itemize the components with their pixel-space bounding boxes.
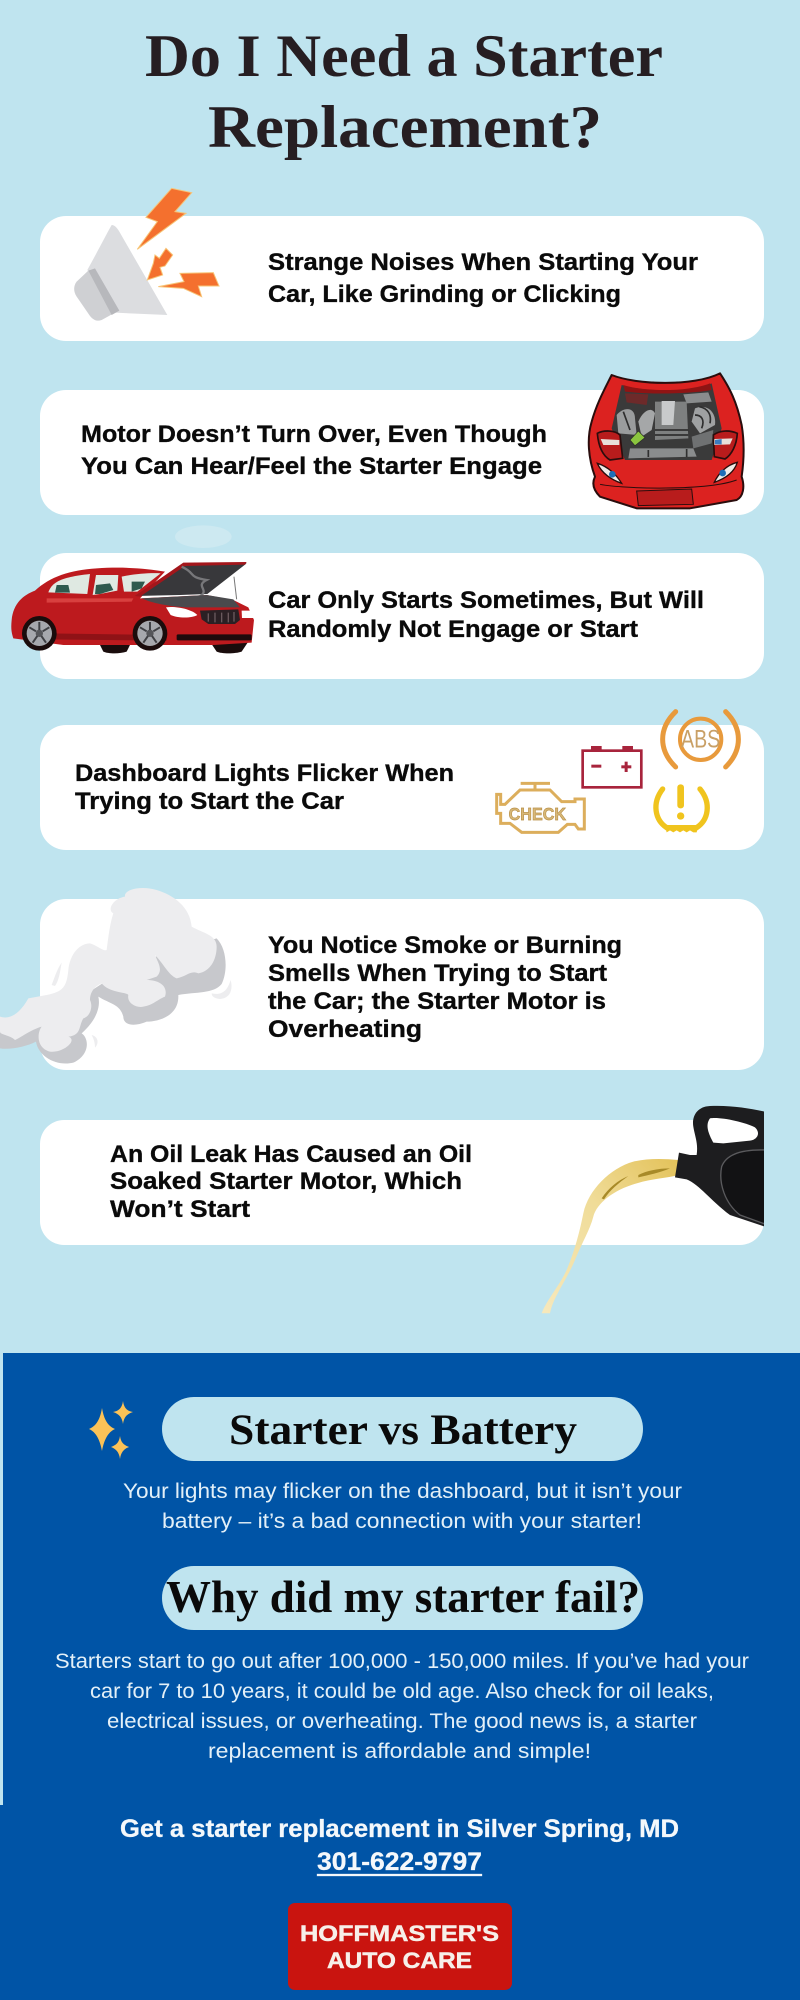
panel: oil leak [40,1106,765,1313]
logo: Hoffmaster's Auto Care [288,1903,512,1990]
icon: red car with open hood [589,373,744,508]
logo: Hoffmaster's Auto Care: HOFFMASTER'S [300,1921,499,1946]
text: strange noises [268,249,698,308]
text: why did my starter fail body: electrical issues, or overheating. The good news is, a starter [107,1710,697,1733]
text: dashboard lights flicker: Trying to Start the Car [75,788,344,815]
icon: red sedan with open hood [11,525,254,653]
text: motor doesn't turn over [81,421,547,480]
text: dashboard lights flicker [75,760,454,815]
icon: battery light [583,746,641,787]
call to action: Get a starter replacement in Silver Spring, MD [120,1815,679,1843]
heading: starter vs battery: Starter vs Battery [229,1407,578,1454]
icon: check engine light [497,783,584,832]
icon: smoke cloud [0,888,232,1064]
text: smoke or burning smells: Smells When Trying to Start [268,960,607,987]
text: smoke or burning smells: You Notice Smoke or Burning [268,932,622,959]
title: Replacement? [208,94,602,160]
text: car only starts sometimes [268,587,704,643]
text: smoke or burning smells [268,932,622,1043]
panel: blue information section [0,1353,800,2000]
panel: strange noises [40,188,764,341]
text: car only starts sometimes: Randomly Not Engage or Start [268,616,638,643]
text: strange noises: Strange Noises When Starting Your [268,249,698,276]
text: oil leak: An Oil Leak Has Caused an Oil [110,1141,472,1168]
heading: why did my starter fail: Why did my starter fail? [166,1572,640,1622]
text: oil leak: Won’t Start [110,1196,250,1223]
icon: oil bottle pouring [542,1106,765,1313]
title [145,23,663,160]
panel: dashboard lights flicker [40,712,764,850]
logo: Hoffmaster's Auto Care: AUTO CARE [327,1948,472,1973]
text: why did my starter fail body [55,1650,749,1763]
text: motor doesn't turn over: Motor Doesn’t Turn Over, Even Though [81,421,547,448]
text: starter vs battery body: Your lights may flicker on the dashboard, but it isn’t your [123,1480,682,1503]
text: oil leak: Soaked Starter Motor, Which [110,1168,462,1195]
text: why did my starter fail body: car for 7 to 10 years, it could be old age. Also check for oil leaks, [90,1680,714,1703]
text: smoke or burning smells: the Car; the Starter Motor is [268,988,606,1015]
text: why did my starter fail body: replacement is affordable and simple! [208,1740,591,1763]
call to action [120,1815,679,1876]
icon: check engine light: CHECK [509,804,566,824]
panel: car only starts sometimes [11,525,764,679]
text: oil leak [110,1141,472,1223]
text: car only starts sometimes: Car Only Starts Sometimes, But Will [268,587,704,614]
heading: starter vs battery [162,1397,643,1461]
icon: sparkles [89,1401,133,1459]
icon: ABS light: ABS [681,727,720,754]
text: starter vs battery body [123,1480,682,1533]
text: starter vs battery body: battery – it’s a bad connection with your starter! [162,1510,642,1533]
text: strange noises: Car, Like Grinding or Clicking [268,281,621,308]
icon: tire pressure light [656,784,707,832]
icon: ABS light [663,712,738,767]
call to action: 301-622-9797 [317,1848,482,1876]
icon: speaker with lightning bolts [74,188,219,321]
title: Do I Need a Starter [145,23,663,89]
panel: smoke or burning smells [0,888,764,1070]
icon: dashboard warning lights [497,712,738,832]
panel: motor doesn't turn over [40,373,764,515]
text: motor doesn't turn over: You Can Hear/Feel the Starter Engage [81,453,542,480]
text: smoke or burning smells: Overheating [268,1016,422,1043]
text: dashboard lights flicker: Dashboard Lights Flicker When [75,760,454,787]
text: why did my starter fail body: Starters start to go out after 100,000 - 150,000 miles. If you’ve had your [55,1650,749,1673]
